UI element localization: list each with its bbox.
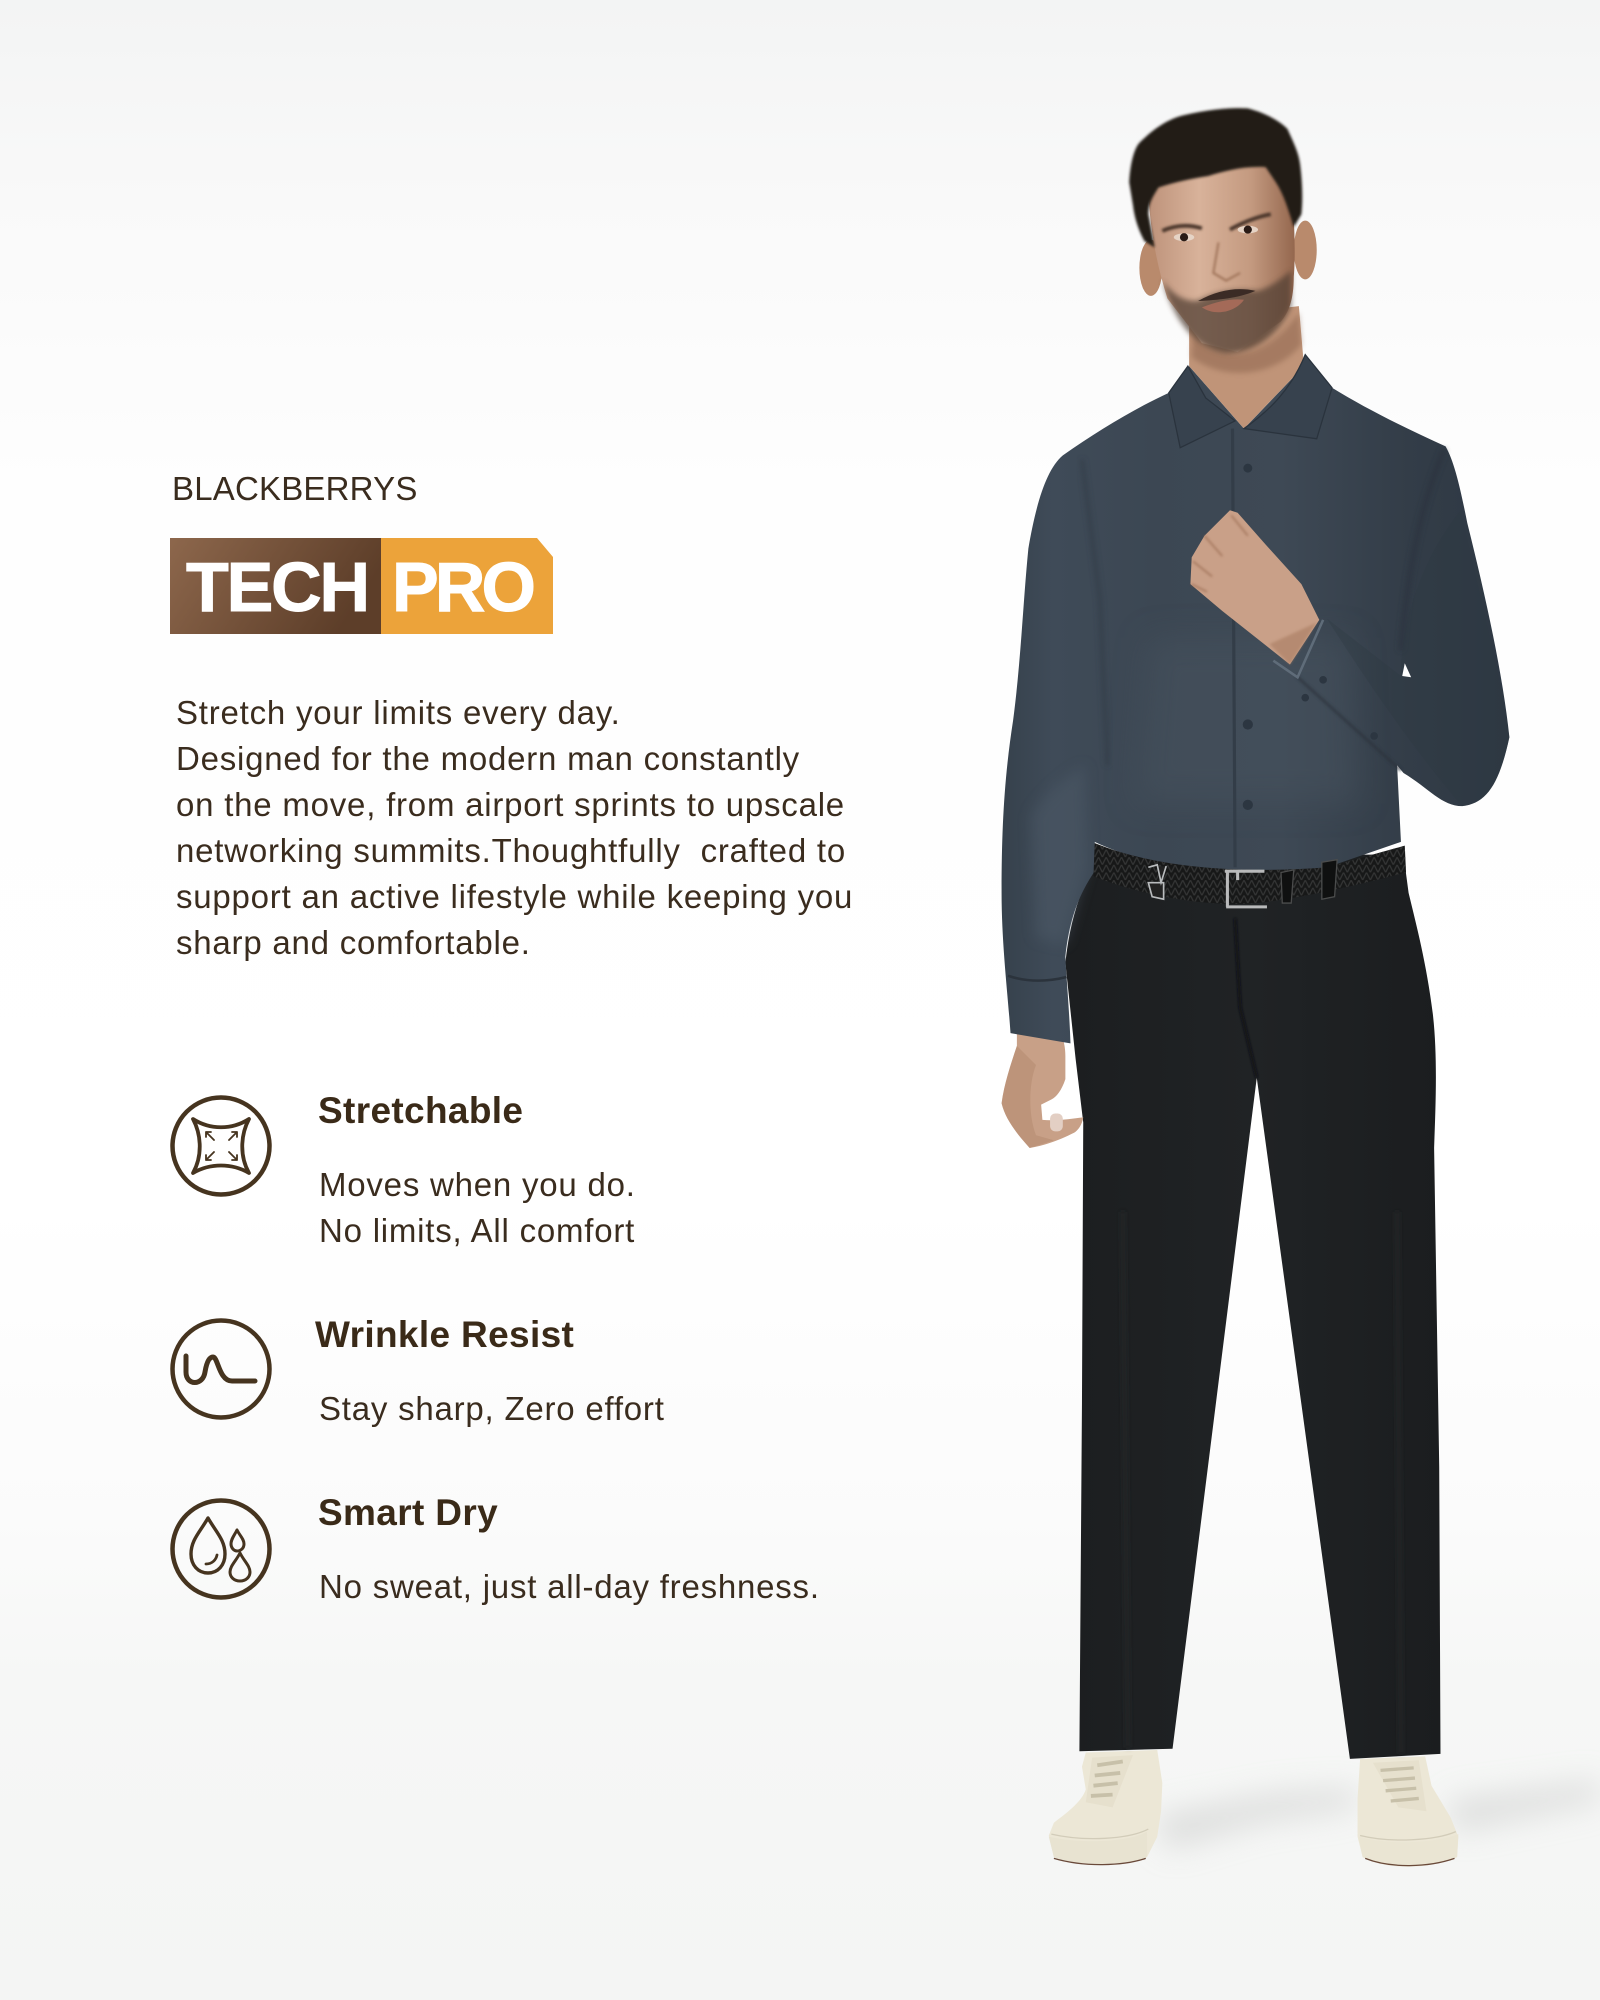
- intro paragraph: networking summits.Thoughtfully crafted to: [176, 832, 846, 869]
- face: [1148, 147, 1295, 352]
- shirt: [1002, 365, 1509, 1043]
- facial features: [1162, 214, 1271, 312]
- logo word: TECH: TECH: [186, 548, 370, 626]
- figure: male model: [1002, 108, 1600, 1867]
- beard: [1162, 270, 1291, 353]
- logo brown panel: [170, 538, 381, 634]
- heading: Wrinkle Resist: [315, 1314, 574, 1355]
- intro paragraph: Stretch your limits every day.: [176, 694, 621, 731]
- intro paragraph: sharp and comfortable.: [176, 924, 531, 961]
- description: Moves when you do.: [319, 1166, 636, 1203]
- feature: Smart Dry: [172, 1492, 820, 1605]
- trousers: [1065, 855, 1440, 1759]
- logo orange panel: [381, 538, 553, 634]
- logo: Tech Pro: [170, 538, 553, 634]
- description: [319, 1166, 636, 1249]
- neck: [1189, 306, 1304, 429]
- intro paragraph: Designed for the modern man constantly: [176, 740, 800, 777]
- icon: wrinkle line: [172, 1320, 270, 1418]
- intro paragraph: [176, 694, 853, 961]
- feature: Stretchable: [172, 1090, 636, 1249]
- intro paragraph: on the move, from airport sprints to upscale: [176, 786, 845, 823]
- brand name: BLACKBERRYS: [172, 470, 418, 507]
- description: Stay sharp, Zero effort: [319, 1390, 665, 1427]
- heading: Smart Dry: [318, 1492, 498, 1533]
- collar: [1169, 355, 1332, 448]
- intro paragraph: support an active lifestyle while keeping you: [176, 878, 853, 915]
- ears: [1139, 221, 1317, 296]
- description: No limits, All comfort: [319, 1212, 635, 1249]
- belt: [1093, 843, 1406, 907]
- left hand: [1002, 1028, 1083, 1148]
- description: No sweat, just all-day freshness.: [319, 1568, 820, 1605]
- icon: stretch fabric: [172, 1098, 270, 1194]
- shoe: right: [1358, 1756, 1458, 1867]
- right hand on shirt: [1190, 510, 1323, 677]
- hair: [1129, 108, 1302, 247]
- floor shadow: [1155, 1781, 1600, 1849]
- heading: Stretchable: [318, 1090, 523, 1131]
- logo word: PRO: PRO: [392, 548, 536, 626]
- icon: water drops: [172, 1500, 270, 1598]
- feature: Wrinkle Resist: [172, 1314, 665, 1427]
- shoe: left: [1049, 1750, 1162, 1865]
